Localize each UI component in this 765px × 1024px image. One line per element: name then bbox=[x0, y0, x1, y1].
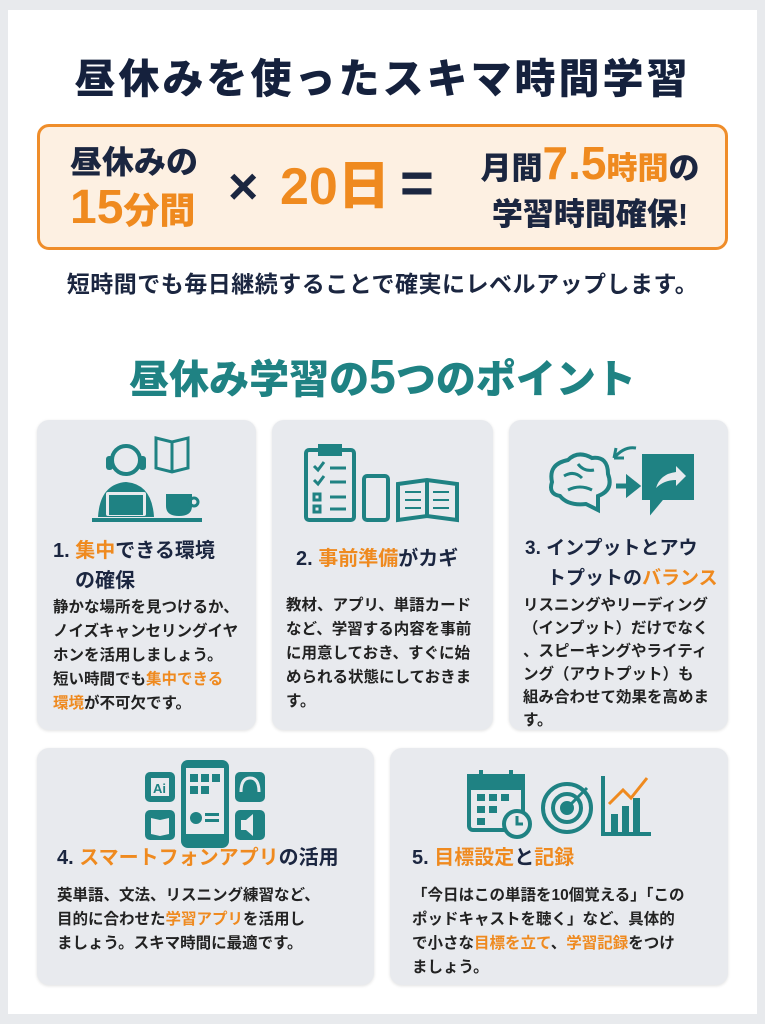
result: 月間7.5時間の bbox=[481, 137, 699, 189]
title: 昼休みを使ったスキマ時間学習 bbox=[74, 56, 690, 102]
formula box bbox=[37, 124, 728, 250]
icon: smartphone apps: Ai bbox=[153, 781, 166, 796]
body: められる状態にしておきま bbox=[286, 669, 471, 686]
body bbox=[53, 598, 239, 712]
icon: person with laptop, book, coffee bbox=[92, 436, 202, 522]
panel: point 2 bbox=[272, 420, 493, 730]
body: で小さな目標を立て、学習記録をつけ bbox=[412, 935, 675, 952]
section heading: 昼休み学習の5つのポイント bbox=[129, 351, 636, 404]
body: （インプット）だけでなく bbox=[523, 620, 709, 637]
left term bbox=[70, 144, 198, 234]
body: ポッドキャストを聴く」など、具体的 bbox=[412, 911, 675, 928]
body bbox=[523, 596, 709, 729]
heading bbox=[53, 540, 215, 592]
body: など、学習する内容を事前 bbox=[286, 621, 471, 638]
body: ましょう。スキマ時間に最適です。 bbox=[57, 935, 303, 952]
body: 環境が不可欠です。 bbox=[53, 695, 191, 712]
body: 短い時間でも集中できる bbox=[53, 671, 223, 688]
body: 目的に合わせた学習アプリを活用し bbox=[57, 911, 305, 928]
body: ホンを活用しましょう。 bbox=[53, 647, 223, 664]
body: 教材、アプリ、単語カード bbox=[286, 597, 471, 614]
body: ましょう。 bbox=[412, 959, 489, 976]
body: ング（アウトプット）も bbox=[523, 666, 694, 683]
panel: point 1 bbox=[37, 420, 256, 730]
heading: 1. 集中できる環境 bbox=[53, 540, 215, 562]
heading: 5. 目標設定と記録 bbox=[412, 847, 574, 869]
body bbox=[57, 886, 320, 952]
panel: point 3 bbox=[509, 420, 728, 730]
body: 静かな場所を見つけるか、 bbox=[53, 599, 239, 616]
heading: の確保 bbox=[75, 570, 135, 592]
heading: 3. インプットとアウ bbox=[525, 538, 698, 559]
body: 「今日はこの単語を10個覚える」「この bbox=[412, 887, 685, 904]
heading: トプットのバランス bbox=[547, 568, 718, 589]
panel: point 5 bbox=[390, 748, 728, 985]
body bbox=[412, 886, 685, 976]
left term: 15分間 bbox=[70, 181, 195, 234]
body: 組み合わせて効果を高めま bbox=[523, 689, 709, 706]
heading: 2. 事前準備がカギ bbox=[296, 548, 458, 570]
result bbox=[481, 137, 699, 232]
body: 、スピーキングやライティ bbox=[523, 643, 707, 660]
icon: smartphone apps bbox=[145, 760, 265, 848]
left term: 昼休みの bbox=[70, 144, 198, 180]
heading: 4. スマートフォンアプリの活用 bbox=[57, 847, 339, 869]
icon: brain to speech bbox=[549, 446, 694, 516]
body: す。 bbox=[286, 693, 315, 710]
body: に用意しておき、すぐに始 bbox=[286, 645, 470, 662]
subtitle: 短時間でも毎日継続することで確実にレベルアップします。 bbox=[67, 271, 698, 297]
panel: point 4 bbox=[37, 748, 374, 985]
equals sign: = bbox=[400, 151, 434, 216]
heading bbox=[525, 538, 718, 589]
body: 英単語、文法、リスニング練習など、 bbox=[57, 887, 320, 904]
multiply sign: × bbox=[228, 158, 258, 216]
20 days: 20日 bbox=[280, 158, 390, 216]
body bbox=[286, 596, 471, 710]
icon: checklist, phone, book bbox=[304, 444, 459, 522]
body: リスニングやリーディング bbox=[523, 597, 708, 614]
body: ノイズキャンセリングイヤ bbox=[53, 623, 238, 640]
result: 学習時間確保! bbox=[492, 197, 688, 232]
body: す。 bbox=[523, 712, 552, 729]
icon: calendar, target, chart bbox=[467, 770, 651, 839]
